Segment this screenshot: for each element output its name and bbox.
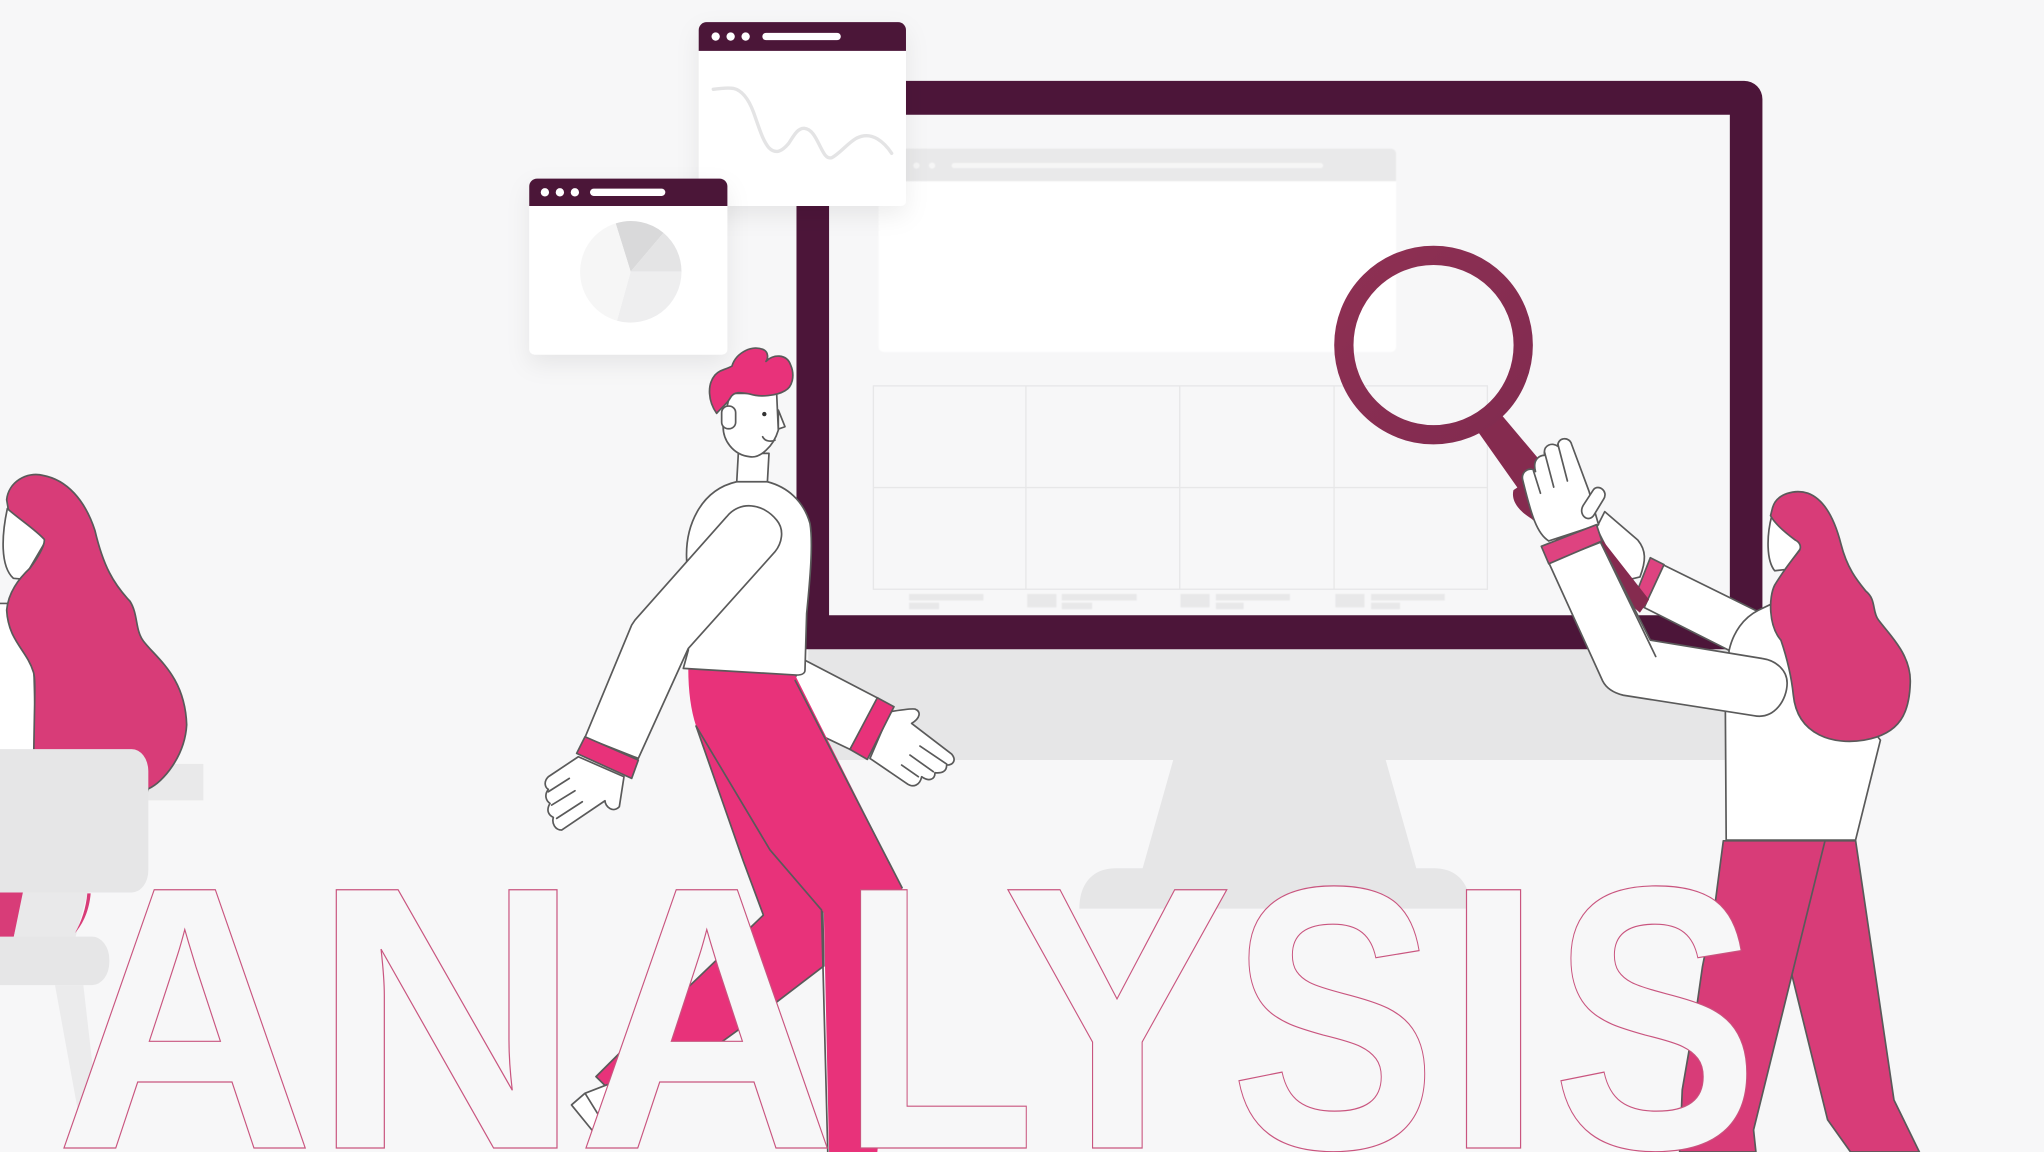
woman back sleeve xyxy=(1644,565,1758,650)
woman left pants xyxy=(1680,841,1825,1152)
man leg crease xyxy=(696,680,902,1152)
man back sleeve xyxy=(787,659,878,749)
man front arm xyxy=(585,506,782,758)
table labels xyxy=(909,594,1445,609)
man ear xyxy=(722,406,736,429)
man front leg xyxy=(688,669,902,1152)
woman right pants xyxy=(1792,841,1919,1152)
woman front hand xyxy=(1522,439,1599,541)
monitor frame xyxy=(796,81,1762,649)
man back hand xyxy=(870,709,954,786)
woman with magnifier xyxy=(1344,255,1919,1152)
man eye xyxy=(762,412,766,416)
woman front cuff xyxy=(1541,525,1602,564)
chair stem xyxy=(13,890,88,939)
window: line chart xyxy=(699,22,906,206)
screen header bar xyxy=(879,149,1396,181)
woman thumb xyxy=(1582,488,1605,519)
magnifier handle xyxy=(1477,412,1649,613)
left woman with chair xyxy=(0,475,203,1113)
chair leg xyxy=(55,985,94,1113)
pants sliver xyxy=(75,893,91,933)
monitor base xyxy=(1079,868,1470,909)
monitor chin xyxy=(808,639,1753,760)
man front hand xyxy=(545,757,624,830)
woman hair xyxy=(1771,492,1910,741)
woman front arm xyxy=(1549,542,1787,716)
man neck xyxy=(737,453,769,483)
monitor xyxy=(796,81,1762,909)
line chart curve xyxy=(713,88,892,158)
pie chart xyxy=(580,221,682,323)
left woman face xyxy=(3,500,47,579)
man face xyxy=(723,393,778,457)
left woman hair xyxy=(7,475,187,813)
man rear leg xyxy=(596,726,824,1090)
woman back cuff xyxy=(1638,558,1664,608)
woman torso xyxy=(1725,603,1880,840)
man front cuff xyxy=(577,737,638,778)
screen panel xyxy=(879,149,1396,352)
man walking xyxy=(545,348,954,1152)
screen data table xyxy=(873,386,1487,589)
magnifying glass xyxy=(1344,255,1649,613)
window: pie chart xyxy=(529,179,727,355)
woman face xyxy=(1768,512,1804,571)
line chart header xyxy=(699,22,906,51)
left woman body xyxy=(0,603,37,769)
man hair xyxy=(710,348,793,413)
man shoe xyxy=(571,1085,619,1132)
man nose xyxy=(778,410,785,429)
title: ANALYSIS outlined letters xyxy=(55,808,1759,1152)
chair seat xyxy=(0,937,109,985)
man back cuff xyxy=(850,698,894,759)
magnifier ring xyxy=(1344,255,1523,435)
pie chart header xyxy=(529,179,727,206)
chair back xyxy=(0,749,148,892)
chair rear bar xyxy=(0,764,203,800)
man smile xyxy=(763,437,775,441)
left woman pants xyxy=(0,890,25,939)
man torso xyxy=(683,482,811,675)
woman back hand xyxy=(1596,512,1644,581)
monitor stand xyxy=(1142,760,1417,871)
